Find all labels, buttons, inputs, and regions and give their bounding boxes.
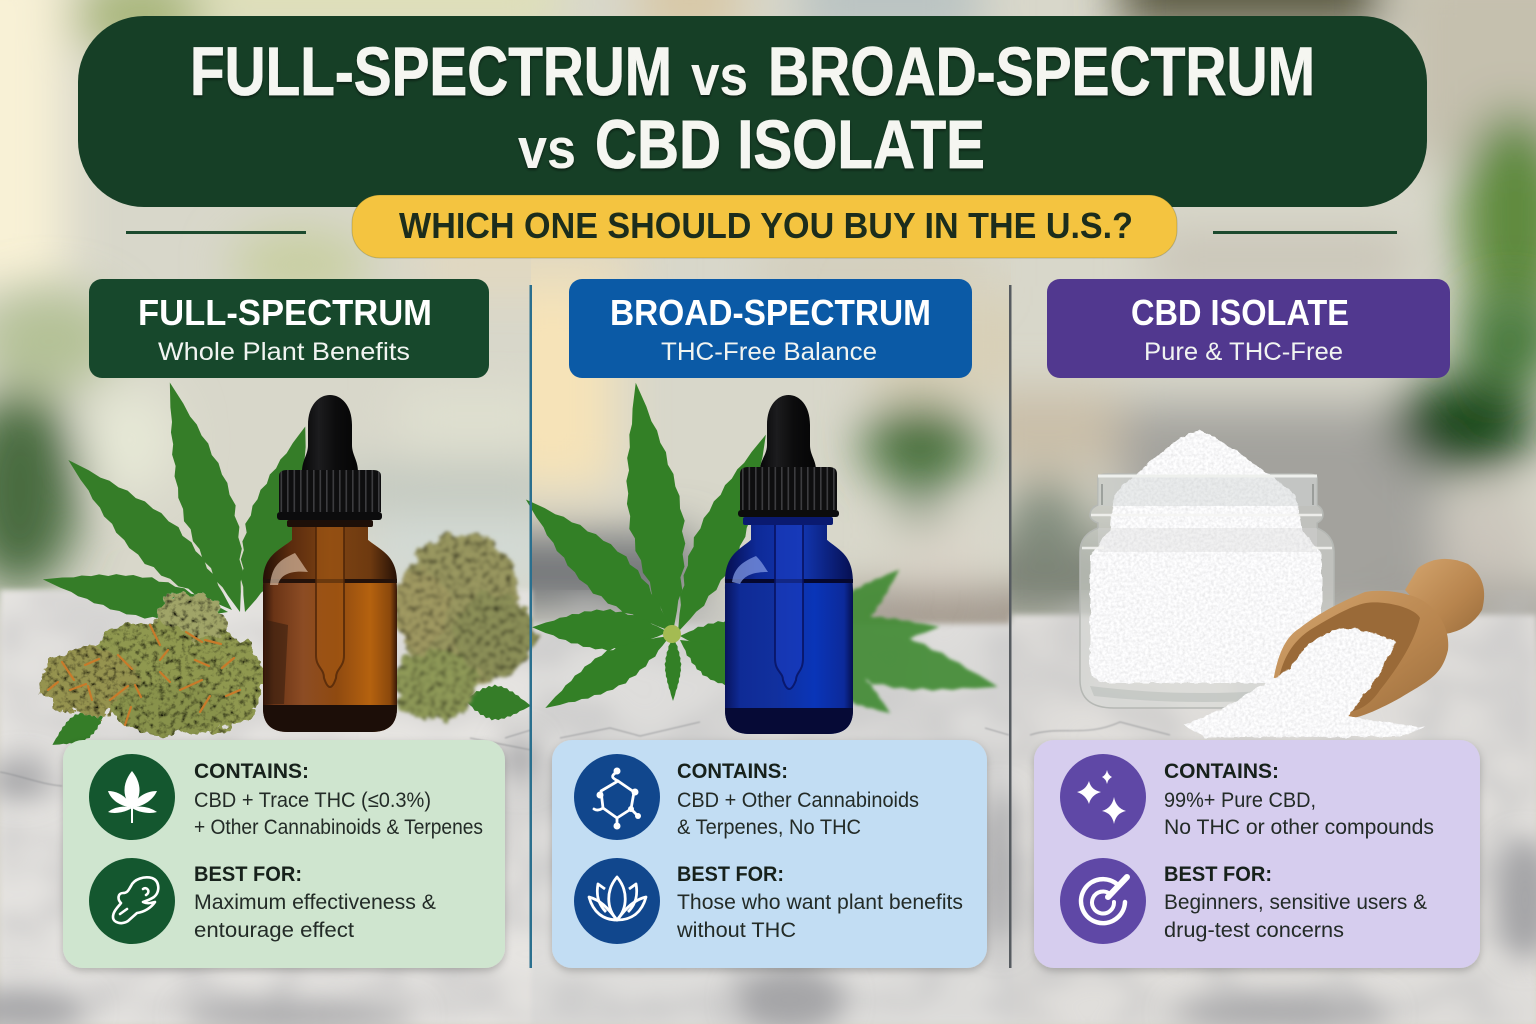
cannabis bud, front: [40, 592, 265, 734]
title line 1: BROAD-SPECTRUM: [768, 33, 1315, 110]
background: column 3 scene: [970, 290, 1536, 630]
text: contains: CBD + Trace THC (≤0.3%): [194, 789, 431, 812]
bottle glass: [725, 522, 853, 734]
amber dropper bottle: [263, 395, 397, 732]
title line 2: CBD ISOLATE: [595, 106, 985, 183]
header: full-spectrum: FULL-SPECTRUM: [138, 292, 432, 333]
panel: full-spectrum details: [63, 740, 505, 968]
ribbed cap: [740, 467, 837, 510]
title line 1: FULL-SPECTRUM: [190, 33, 672, 110]
icon: sparkles: [1060, 754, 1146, 840]
text: best for: BEST FOR:: [677, 862, 784, 886]
section: full-spectrum photo: [39, 375, 535, 757]
icon: ginger root: [89, 858, 175, 944]
title line 2: vs: [518, 117, 576, 181]
text: best for: BEST FOR:: [1164, 862, 1272, 886]
text: contains: [194, 759, 483, 839]
header: broad-spectrum: [569, 279, 972, 378]
icon: lotus: [574, 858, 660, 944]
text: best for: Maximum effectiveness &: [194, 891, 436, 914]
text: best for: Beginners, sensitive users &: [1164, 891, 1427, 914]
dropper rubber bulb: [302, 395, 358, 472]
banner background: [78, 16, 1427, 207]
text: best for: [194, 862, 436, 942]
pipette: [316, 522, 344, 687]
title line 1: vs: [691, 44, 748, 108]
header: broad-spectrum: THC-Free Balance: [661, 338, 877, 366]
header: full-spectrum: [89, 279, 489, 378]
spilled salt: [1184, 628, 1425, 737]
pipette: [775, 522, 803, 689]
header: CBD isolate: [1047, 279, 1450, 378]
text: contains: CBD + Other Cannabinoids: [677, 789, 919, 812]
title banner: [78, 16, 1427, 207]
text: best for: drug-test concerns: [1164, 919, 1344, 942]
text: contains: & Terpenes, No THC: [677, 816, 861, 839]
title line 1: [190, 33, 1315, 110]
salt mound and fill: [1090, 430, 1322, 683]
panel: broad-spectrum details: [552, 740, 987, 968]
cannabis leaf: [39, 375, 532, 757]
background: marble counter: [0, 590, 1536, 1024]
cannabis leaf, front: [509, 379, 791, 724]
bottle glass: [263, 522, 397, 732]
background: column 1 scene: [0, 290, 560, 590]
icon: target: [1060, 858, 1146, 944]
text: best for: [676, 862, 963, 942]
section: CBD isolate photo: [1080, 430, 1484, 737]
header: CBD isolate: Pure & THC-Free: [1144, 338, 1343, 366]
ribbed cap: [279, 470, 381, 512]
cannabis leaf, rear: [783, 556, 1004, 728]
text: best for: entourage effect: [194, 919, 354, 942]
background: column 2 scene: [531, 272, 1009, 627]
cannabis bud, rear right: [392, 532, 535, 720]
subtitle pill: [352, 195, 1177, 258]
glass jar with white powder: [1080, 430, 1334, 708]
text: best for: [1164, 862, 1427, 942]
text: contains: + Other Cannabinoids & Terpenes: [194, 816, 483, 839]
text: contains: [1164, 759, 1434, 839]
text: best for: Those who want plant benefits: [677, 891, 963, 914]
icon: cannabis leaf: [89, 754, 175, 840]
header: full-spectrum: Whole Plant Benefits: [158, 338, 410, 366]
text: contains: CONTAINS:: [677, 759, 788, 783]
text: best for: BEST FOR:: [194, 862, 302, 886]
section: broad-spectrum photo: [509, 379, 1004, 734]
icon: molecule: [574, 754, 660, 840]
text: best for: without THC: [676, 919, 796, 942]
panel: CBD isolate details: [1034, 740, 1480, 968]
header: broad-spectrum: BROAD-SPECTRUM: [610, 292, 931, 333]
dropper rubber bulb: [760, 395, 816, 470]
subtitle pill: WHICH ONE SHOULD YOU BUY IN THE U.S.?: [399, 205, 1133, 246]
text: contains: 99%+ Pure CBD,: [1164, 789, 1316, 812]
wooden scoop: [1273, 559, 1484, 718]
blue dropper bottle: [725, 395, 853, 734]
text: contains: CONTAINS:: [1164, 759, 1279, 783]
text: contains: CONTAINS:: [194, 759, 309, 783]
header: CBD isolate: CBD ISOLATE: [1131, 292, 1349, 333]
text: contains: No THC or other compounds: [1164, 816, 1434, 839]
text: contains: [677, 759, 919, 839]
background: blurred room: [0, 0, 1536, 330]
